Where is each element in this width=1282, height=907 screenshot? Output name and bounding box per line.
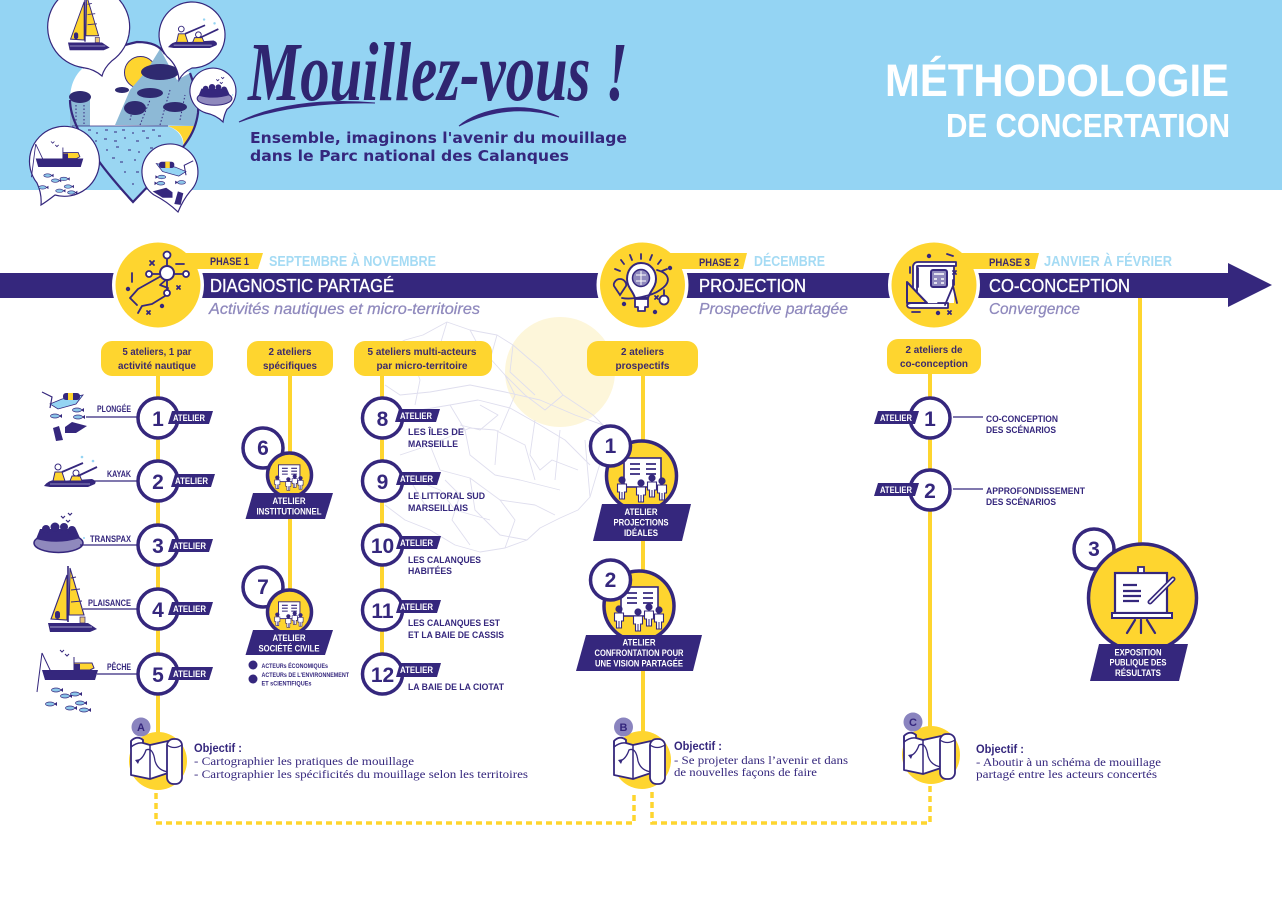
pill: multi-actor workshops bbox=[354, 341, 492, 376]
workshop 6 institutional: INSTITUTIONNEL bbox=[256, 506, 322, 518]
prospective workshop 1 bbox=[590, 426, 691, 541]
workshop 4 sailing: 4 bbox=[152, 599, 164, 622]
phase 1 header: SEPTEMBRE À NOVEMBRE bbox=[269, 253, 436, 270]
co-design workshop 2: DES SCÉNARIOS bbox=[986, 497, 1056, 507]
phase 1 header bbox=[112, 239, 480, 331]
vertical connector lines bbox=[158, 298, 1140, 735]
bubble: sailing bbox=[48, 0, 130, 76]
background map of the Calanques bbox=[385, 317, 615, 552]
phase 1 flag bbox=[185, 253, 263, 269]
phase 1 header: Activités nautiques et micro-territoires bbox=[208, 301, 480, 318]
phase 2 header bbox=[596, 239, 848, 331]
co-design workshop 1: ATELIER bbox=[880, 413, 912, 423]
workshop 10: LES CALANQUES bbox=[408, 555, 481, 565]
workshop 9: ATELIER bbox=[400, 474, 433, 484]
pill: specific workshops bbox=[247, 341, 333, 376]
icon: fishing bbox=[37, 650, 98, 712]
prospective workshop 1: ATELIER bbox=[624, 507, 658, 518]
logo subtitle bbox=[250, 129, 627, 165]
public exhibition bbox=[1074, 529, 1196, 681]
page title: DE CONCERTATION bbox=[946, 107, 1230, 144]
objective B: - Se projeter dans l’avenir et dans bbox=[674, 753, 848, 767]
phase 1 header: DIAGNOSTIC PARTAGÉ bbox=[210, 276, 394, 296]
co-design workshop 1: 1 bbox=[924, 408, 936, 431]
civil society actors list: ACTEURs ÉCONOMIQUEs bbox=[262, 661, 328, 670]
objective B bbox=[613, 718, 848, 789]
prospective workshop 2: ATELIER bbox=[622, 638, 656, 648]
timeline arrow bbox=[0, 263, 1272, 307]
workshop 8: ATELIER bbox=[400, 411, 432, 421]
page title: MÉTHODOLOGIE bbox=[885, 55, 1229, 106]
co-design workshop 2: APPROFONDISSEMENT bbox=[986, 486, 1085, 496]
workshop 11: ATELIER bbox=[400, 602, 433, 612]
bubble: raft bbox=[190, 68, 236, 122]
phase 2 labels: PHASE 2 bbox=[699, 257, 739, 269]
phase 3 icon bbox=[888, 239, 980, 331]
workshop 3 transpax: TRANSPAX bbox=[90, 534, 131, 544]
objective A: A bbox=[137, 722, 145, 734]
workshop 12 bbox=[362, 654, 504, 694]
workshop 10: 10 bbox=[371, 535, 394, 558]
phase 3 header bbox=[888, 239, 1172, 331]
pill: multi-actor workshops: par micro-territoire bbox=[376, 360, 468, 372]
pill: multi-actor workshops: 5 ateliers multi-acteurs bbox=[368, 346, 477, 358]
phase 2 icon bbox=[596, 239, 688, 331]
workshop 2 kayak: 2 bbox=[152, 471, 164, 494]
workshop 4 sailing bbox=[83, 589, 213, 629]
logo subtitle: dans le Parc national des Calanques bbox=[250, 147, 569, 165]
co-design workshop 2 bbox=[874, 470, 1085, 510]
bubble: diving bbox=[142, 144, 198, 212]
workshop 5 fishing: ATELIER bbox=[173, 669, 206, 679]
pill: prospective workshops bbox=[587, 341, 698, 376]
workshop 2 kayak bbox=[90, 461, 215, 501]
workshop 9: MARSEILLAIS bbox=[408, 503, 468, 513]
pill: prospective workshops: prospectifs bbox=[616, 360, 670, 372]
co-design workshop 2: ATELIER bbox=[880, 485, 912, 495]
objective B: Objectif : bbox=[674, 741, 722, 753]
pill: nautical workshops bbox=[101, 341, 213, 376]
phase 2 header: DÉCEMBRE bbox=[754, 253, 825, 270]
public exhibition: RÉSULTATS bbox=[1115, 668, 1161, 679]
logo illustration: heart and speech bubbles bbox=[29, 0, 236, 212]
header band bbox=[0, 0, 1282, 190]
icon: kayak bbox=[44, 456, 97, 487]
phase 2 flag bbox=[670, 253, 747, 269]
workshop 10 bbox=[362, 525, 481, 576]
prospective workshop 2: CONFRONTATION POUR bbox=[594, 648, 684, 659]
pill: specific workshops: 2 ateliers bbox=[268, 346, 312, 358]
objective B: de nouvelles façons de faire bbox=[674, 765, 817, 779]
heart landscape bbox=[69, 42, 198, 202]
workshop 3 transpax: ATELIER bbox=[173, 541, 206, 551]
workshop 9: LE LITTORAL SUD bbox=[408, 491, 485, 501]
workshop 4 sailing: PLAISANCE bbox=[88, 598, 131, 608]
phase 2 header: PROJECTION bbox=[699, 276, 806, 296]
workshop 11: ET LA BAIE DE CASSIS bbox=[408, 630, 504, 640]
workshop 11: LES CALANQUES EST bbox=[408, 618, 500, 628]
workshop 3 transpax bbox=[80, 525, 213, 565]
public exhibition: 3 bbox=[1088, 538, 1100, 561]
workshop 8: 8 bbox=[377, 408, 389, 431]
objective C: C bbox=[909, 717, 917, 729]
civil society actors list bbox=[248, 660, 349, 688]
workshop 8 bbox=[362, 398, 464, 449]
pill: specific workshops: spécifiques bbox=[263, 360, 317, 372]
workshop 11 bbox=[362, 590, 504, 640]
objective A: - Cartographier les pratiques de mouillage bbox=[194, 754, 414, 768]
workshop 7 civil society: ATELIER bbox=[272, 633, 306, 644]
dashed connector bbox=[156, 784, 930, 823]
prospective workshop 1: IDÉALES bbox=[624, 528, 658, 539]
workshop 11: 11 bbox=[371, 600, 394, 623]
icon: sailing bbox=[48, 566, 97, 632]
phase 1 icon bbox=[112, 239, 204, 331]
objective C: partagé entre les acteurs concertés bbox=[976, 767, 1157, 781]
workshop 9: 9 bbox=[377, 471, 388, 494]
workshop 5 fishing: PÊCHE bbox=[107, 661, 131, 672]
workshop 7 civil society bbox=[243, 567, 333, 655]
workshop 12: LA BAIE DE LA CIOTAT bbox=[408, 682, 504, 692]
civil society actors list: ET sCIENTIFIQUEs bbox=[262, 680, 312, 688]
pill: co-design workshops: co-conception bbox=[900, 358, 968, 370]
objective C bbox=[902, 712, 1161, 784]
workshop 4 sailing: ATELIER bbox=[173, 604, 206, 614]
prospective workshop 2: UNE VISION PARTAGÉE bbox=[595, 658, 683, 670]
public exhibition: PUBLIQUE DES bbox=[1110, 658, 1166, 668]
objective A bbox=[129, 718, 528, 790]
phase 2 header: Prospective partagée bbox=[699, 301, 848, 318]
pill: nautical workshops: activité nautique bbox=[118, 360, 196, 372]
phase 1 labels: PHASE 1 bbox=[210, 256, 249, 268]
phase 3 labels: PHASE 3 bbox=[989, 257, 1030, 269]
icon: easel bbox=[1112, 567, 1173, 633]
phase 3 header: JANVIER À FÉVRIER bbox=[1044, 253, 1172, 270]
objective C: - Aboutir à un schéma de mouillage bbox=[976, 755, 1161, 769]
workshop 2 kayak: KAYAK bbox=[107, 469, 131, 479]
prospective workshop 1: PROJECTIONS bbox=[614, 518, 668, 528]
workshop 8: MARSEILLE bbox=[408, 439, 458, 449]
civil society actors list: ACTEURs DE L'ENVIRONNEMENT bbox=[262, 672, 349, 679]
workshop 2 kayak: ATELIER bbox=[175, 476, 208, 486]
prospective workshop 2: 2 bbox=[605, 569, 616, 592]
pill: nautical workshops: 5 ateliers, 1 par bbox=[122, 346, 192, 358]
phase 3 header: CO-CONCEPTION bbox=[989, 276, 1130, 296]
workshop 7 civil society: 7 bbox=[257, 576, 269, 599]
logo title bbox=[239, 26, 628, 126]
workshop 5 fishing: 5 bbox=[152, 664, 164, 687]
workshop 6 institutional bbox=[243, 428, 333, 519]
workshop 1 diving: ATELIER bbox=[173, 413, 205, 423]
icon: diving bbox=[42, 392, 87, 441]
co-design workshop 1: CO-CONCEPTION bbox=[986, 414, 1058, 424]
workshop 10: ATELIER bbox=[400, 538, 433, 548]
workshop 5 fishing bbox=[97, 654, 213, 694]
co-design workshop 2: 2 bbox=[924, 480, 936, 503]
workshop 1 diving: PLONGÉE bbox=[97, 404, 131, 414]
objective A: - Cartographier les spécificités du mouillage selon les territoires bbox=[194, 767, 528, 781]
workshop 10: HABITÉES bbox=[408, 566, 452, 576]
pill: co-design workshops: 2 ateliers de bbox=[906, 344, 963, 356]
workshop 12: 12 bbox=[371, 664, 394, 687]
co-design workshop 1 bbox=[874, 398, 1058, 438]
public exhibition: EXPOSITION bbox=[1114, 648, 1162, 658]
logo title: Mouillez-vous ! bbox=[247, 26, 628, 119]
phase 3 flag bbox=[960, 253, 1039, 269]
prospective workshop 2 bbox=[576, 560, 702, 671]
workshop 6 institutional: ATELIER bbox=[272, 496, 306, 507]
pill: co-design workshops bbox=[887, 339, 981, 374]
workshop 8: LES ÎLES DE bbox=[408, 426, 464, 437]
phase 3 header: Convergence bbox=[989, 301, 1080, 318]
objective C: Objectif : bbox=[976, 744, 1024, 756]
workshop 6 institutional: 6 bbox=[257, 437, 269, 460]
bubble: fishing bbox=[29, 126, 99, 205]
bubble: kayak bbox=[159, 2, 225, 80]
objective A: Objectif : bbox=[194, 743, 242, 755]
prospective workshop 1: 1 bbox=[605, 435, 617, 458]
page title bbox=[885, 55, 1230, 144]
workshop 1 diving bbox=[86, 398, 213, 438]
workshop 12: ATELIER bbox=[400, 665, 433, 675]
pill: prospective workshops: 2 ateliers bbox=[621, 346, 664, 358]
icon: transpax bbox=[34, 513, 85, 552]
workshop 3 transpax: 3 bbox=[152, 535, 164, 558]
workshop 9 bbox=[362, 461, 485, 513]
workshop 7 civil society: SOCIÉTÉ CIVILE bbox=[258, 644, 320, 654]
workshop 1 diving: 1 bbox=[152, 408, 164, 431]
logo subtitle: Ensemble, imaginons l'avenir du mouillage bbox=[250, 129, 627, 147]
co-design workshop 1: DES SCÉNARIOS bbox=[986, 425, 1056, 435]
objective B: B bbox=[620, 722, 628, 734]
